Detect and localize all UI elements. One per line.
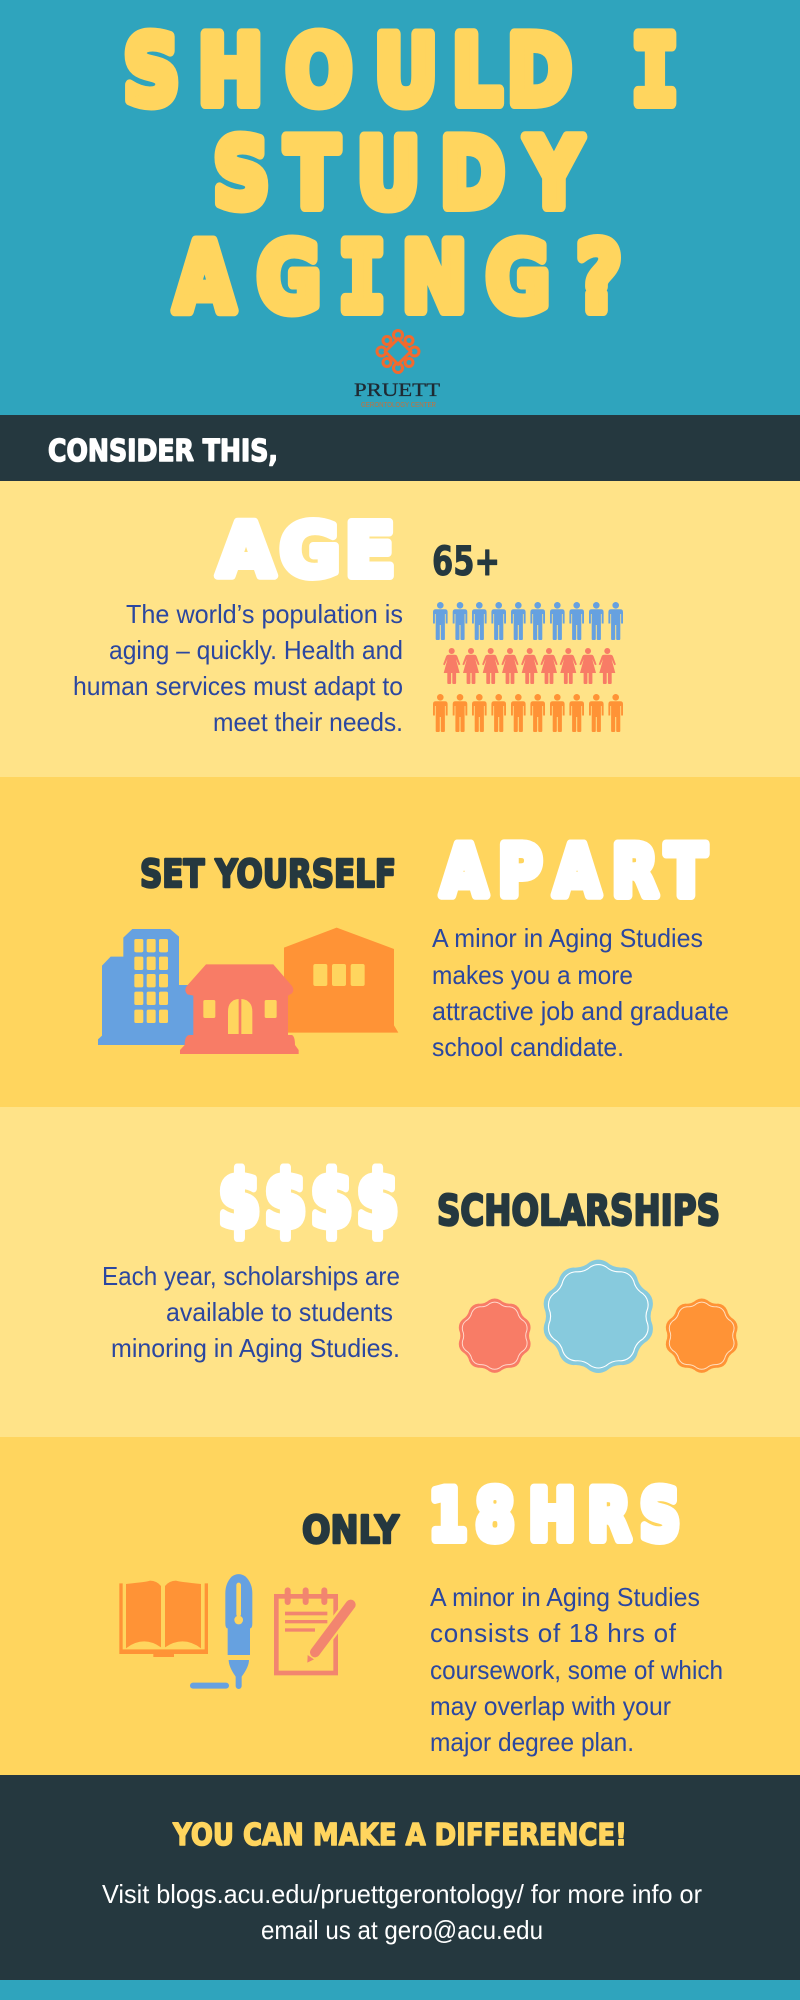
title: I [339, 223, 385, 333]
heading: 18hrs: 18HRS [429, 1474, 680, 1556]
text: apart body: school candidate. [432, 1032, 624, 1062]
logo wordmark: PRUETT [354, 380, 440, 401]
footer heading: YOU CAN MAKE A DIFFERENCE! [172, 1818, 627, 1853]
text: age body: The world’s population is [126, 599, 403, 629]
footer text: Visit blogs.acu.edu/pruettgerontology/ for more info or [102, 1879, 702, 1909]
title: NG? [402, 223, 622, 333]
panel: age [0, 481, 800, 777]
icon: blue office tower [98, 929, 195, 1045]
icon: blue seal [544, 1260, 653, 1373]
text: age body [73, 599, 403, 737]
panel: footer call to action [0, 1775, 800, 1980]
footer text [102, 1879, 702, 1945]
text: hours body: may overlap with your [430, 1691, 671, 1721]
title: SHOULD [123, 16, 572, 126]
panel: consider this band [0, 415, 800, 481]
text: age body: meet their needs. [213, 707, 403, 737]
text: apart body: makes you a more [432, 960, 633, 990]
text: age body: human services must adapt to [73, 671, 403, 701]
title: STUDY [213, 119, 583, 229]
pictogram: orange men row [433, 694, 623, 732]
text: scholarships body: Each year, scholarships are [102, 1261, 400, 1291]
heading: dollar signs: $$$$ [218, 1155, 399, 1245]
text: hours body: consists of 18 hrs of [430, 1618, 677, 1648]
logo subtitle: GERONTOLOGY CENTER [361, 400, 436, 409]
band heading: CONSIDER THIS, [48, 434, 278, 469]
icon: coral seal [459, 1298, 531, 1373]
heading: scholarships: SCHOLARSHIPS [437, 1186, 720, 1235]
heading: apart: APART [441, 832, 706, 913]
text: age body: aging – quickly. Health and [109, 635, 403, 665]
title: AG [174, 223, 321, 333]
text: hours body: major degree plan. [430, 1727, 634, 1757]
pictogram: coral women row [443, 648, 616, 684]
icon: orange seal [666, 1298, 738, 1373]
text: apart body [432, 923, 729, 1062]
heading: only: ONLY [302, 1508, 399, 1552]
text: apart body: A minor in Aging Studies [432, 923, 703, 953]
panel: header [0, 0, 800, 415]
panel: set yourself apart [0, 777, 800, 1107]
text: scholarships body: minoring in Aging Studies. [111, 1333, 400, 1363]
icon: fountain pen [190, 1574, 252, 1689]
icon: notepad and pencil [276, 1587, 352, 1673]
panel: only 18 hrs [0, 1437, 800, 1775]
footer text: email us at gero@acu.edu [261, 1915, 543, 1945]
panel: scholarships [0, 1107, 800, 1437]
illustration: campus buildings [98, 928, 398, 1054]
pictogram: blue men row [433, 602, 623, 640]
icon: open book [119, 1581, 208, 1657]
title [123, 16, 678, 333]
text: hours body [430, 1582, 723, 1757]
heading: set yourself: SET YOURSELF [140, 852, 396, 896]
text: apart body: attractive job and graduate [432, 996, 729, 1026]
title: I [632, 16, 678, 126]
heading: age: AGE [217, 508, 395, 594]
icon: coral house [180, 964, 299, 1054]
text: hours body: coursework, some of which [430, 1655, 723, 1685]
illustration: study supplies [119, 1574, 352, 1689]
text: scholarships body: available to students [166, 1297, 393, 1327]
text: hours body: A minor in Aging Studies [430, 1582, 700, 1612]
icon: orange hall [284, 928, 398, 1033]
icon: Pruett logo mark [377, 330, 419, 372]
bottom strip [0, 1980, 800, 2000]
heading: 65+: 65+ [432, 539, 500, 585]
text: scholarships body [102, 1261, 400, 1363]
